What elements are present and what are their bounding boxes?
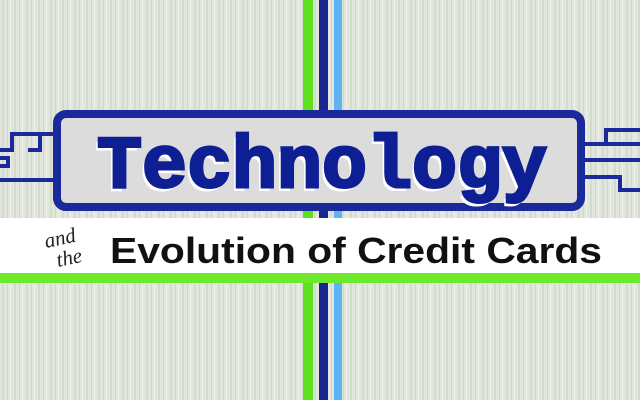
title text: Technology bbox=[94, 130, 544, 214]
subtitle small: and bbox=[42, 223, 78, 253]
circuit traces left bbox=[0, 134, 53, 180]
vertical colour stripes bbox=[303, 0, 342, 400]
white subtitle band bbox=[0, 218, 640, 273]
green line bbox=[0, 273, 640, 283]
circuit traces right bbox=[585, 130, 640, 190]
subtitle small: the bbox=[54, 243, 84, 272]
title box: Technology bbox=[97, 126, 547, 210]
subtitle small bbox=[42, 223, 84, 272]
subtitle: Evolution of Credit Cards bbox=[110, 230, 602, 271]
